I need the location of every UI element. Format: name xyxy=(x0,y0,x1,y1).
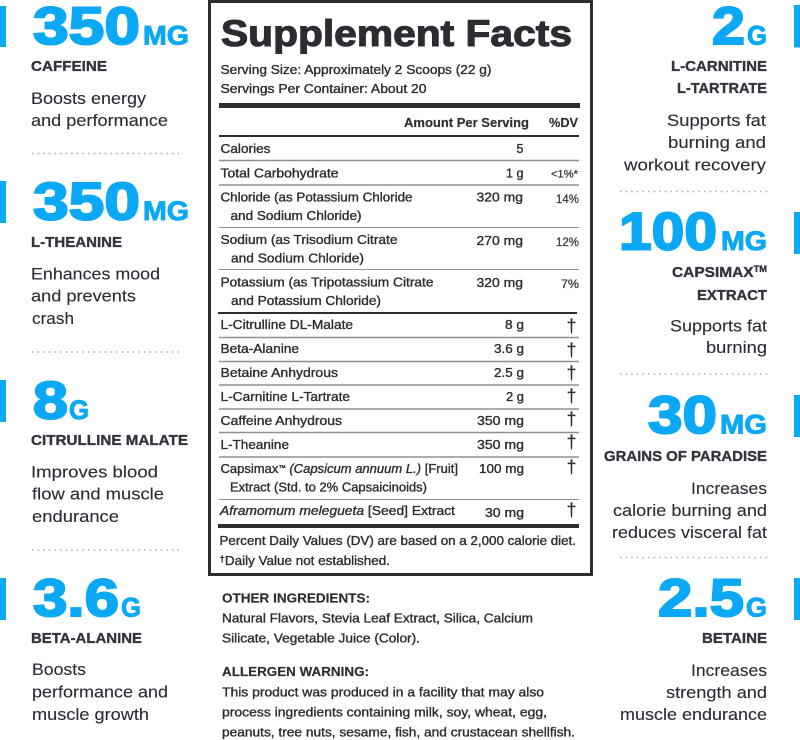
callout: 100 mg capsimax extract xyxy=(619,202,800,357)
callout: 100 mg capsimax extract: EXTRACT xyxy=(697,287,767,304)
text block: other ingredients xyxy=(222,592,533,646)
callout: 2.5 g betaine: strength and xyxy=(666,684,767,702)
callout: 8 g citrulline malate xyxy=(0,372,188,526)
row: betaine: 2.5 g xyxy=(494,366,524,380)
row: l-citrulline: L-Citrulline DL-Malate xyxy=(220,318,353,332)
callout: 30 mg grains of paradise: Increases xyxy=(691,480,767,498)
callout: 8 g citrulline malate: flow and muscle xyxy=(32,486,164,504)
callout: 100 mg capsimax extract: TM xyxy=(754,264,767,274)
row: l-theanine: 350 mg xyxy=(477,438,524,452)
row: sodium: Sodium (as Trisodium Citrate xyxy=(220,233,398,247)
callout: 3.6 g beta-alanine xyxy=(0,569,168,724)
callout: 350 mg caffeine: MG xyxy=(143,20,189,50)
row: capsimax: 100 mg xyxy=(479,462,524,476)
callout: 2.5 g betaine xyxy=(620,569,800,724)
row: betaine xyxy=(220,363,577,383)
footnotes: Percent Daily Values (DV) are based on a 2,000 calorie diet. xyxy=(220,534,576,548)
row: potassium: Potassium (as Tripotassium Citrate xyxy=(220,276,434,290)
footnotes xyxy=(220,534,576,568)
row: l-carnitine: † xyxy=(566,386,577,406)
callout: 3.6 g beta-alanine: BETA-ALANINE xyxy=(31,630,142,647)
left column: ingredient callouts xyxy=(0,0,189,724)
callout: 2 g l-carnitine l-tartrate xyxy=(623,0,800,174)
table header xyxy=(404,116,579,130)
callout: 350 mg caffeine xyxy=(0,0,189,130)
row: total carbohydrate: Total Carbohydrate xyxy=(220,166,339,180)
callout: 2.5 g betaine: muscle endurance xyxy=(620,706,767,724)
row: sodium: 270 mg xyxy=(476,234,523,248)
callout: 2 g l-carnitine l-tartrate: L-CARNITINE xyxy=(671,58,767,75)
row: chloride: 320 mg xyxy=(476,190,523,204)
callout: 3.6 g beta-alanine: performance and xyxy=(32,684,168,702)
row: calories xyxy=(220,142,524,156)
row: capsimax: (Capsicum annuum L.) [Fruit] xyxy=(289,462,457,476)
table header: Amount Per Serving xyxy=(404,116,529,130)
callout: 350 mg l-theanine: and prevents xyxy=(31,288,136,306)
callout: 350 mg l-theanine xyxy=(0,172,189,328)
text block: other ingredients: OTHER INGREDIENTS: xyxy=(222,592,370,606)
callout: 2.5 g betaine: 2.5 xyxy=(658,569,744,628)
callout: 100 mg capsimax extract: CAPSIMAX xyxy=(672,264,751,281)
text block: allergen warning xyxy=(222,665,575,740)
callout: 2.5 g betaine: G xyxy=(746,592,767,622)
table header: %DV xyxy=(549,116,579,130)
panel: supplement facts xyxy=(210,2,592,574)
callout: 350 mg caffeine: CAFFEINE xyxy=(31,58,107,75)
row: calories: 5 xyxy=(516,142,524,156)
callout: 30 mg grains of paradise: reduces visceral fat xyxy=(612,524,767,542)
callout: 3.6 g beta-alanine: muscle growth xyxy=(32,706,149,724)
text block: allergen warning: This product was produced in a facility that may also xyxy=(222,686,544,700)
row: potassium xyxy=(220,276,579,308)
callout: 8 g citrulline malate: Improves blood xyxy=(31,464,158,482)
row: l-theanine: † xyxy=(566,432,577,452)
row: beta-alanine xyxy=(220,340,577,360)
row: total carbohydrate xyxy=(220,166,579,180)
row: chloride: 14% xyxy=(556,194,579,206)
row: l-carnitine xyxy=(220,386,577,406)
callout: 350 mg caffeine: Boosts energy xyxy=(31,90,147,108)
row: capsimax: † xyxy=(566,457,577,477)
row: calories: Calories xyxy=(220,142,270,156)
row: potassium: and Potassium Chloride) xyxy=(231,294,381,308)
callout: 30 mg grains of paradise: 30 xyxy=(648,386,717,445)
callout: 350 mg l-theanine: 350 xyxy=(33,172,140,232)
callout: 350 mg l-theanine: L-THEANINE xyxy=(31,234,122,251)
callout: 350 mg l-theanine: MG xyxy=(143,196,189,226)
row: chloride: and Sodium Chloride) xyxy=(230,209,362,223)
callout: 3.6 g beta-alanine: Boosts xyxy=(32,661,86,679)
row: caffeine: Caffeine Anhydrous xyxy=(220,414,342,428)
callout: 8 g citrulline malate: CITRULLINE MALATE xyxy=(31,432,188,449)
row: caffeine xyxy=(220,409,577,429)
row: l-carnitine: 2 g xyxy=(506,390,524,404)
callout: 2 g l-carnitine l-tartrate: G xyxy=(747,20,767,50)
callout: 30 mg grains of paradise xyxy=(604,386,800,542)
row: l-carnitine: L-Carnitine L-Tartrate xyxy=(220,390,350,404)
row: potassium: 7% xyxy=(561,279,579,291)
row: l-citrulline: † xyxy=(566,316,577,336)
right column: ingredient callouts xyxy=(604,0,800,724)
row: betaine: † xyxy=(566,363,577,383)
row: beta-alanine: † xyxy=(566,340,577,360)
callout: 350 mg l-theanine: crash xyxy=(32,310,74,328)
row: caffeine: † xyxy=(566,409,577,429)
row: capsimax: Extract (Std. to 2% Capsaicinoids) xyxy=(230,480,427,494)
serving information: Serving Size: Approximately 2 Scoops (22 g) xyxy=(220,63,492,77)
row: betaine: Betaine Anhydrous xyxy=(220,366,338,380)
row: l-citrulline xyxy=(220,316,577,336)
row: l-theanine: L-Theanine xyxy=(220,438,289,452)
callout: 3.6 g beta-alanine: 3.6 xyxy=(33,569,119,628)
text block: allergen warning: peanuts, tree nuts, sesame, fish, and crustacean shellfish. xyxy=(222,726,575,740)
callout: 8 g citrulline malate: endurance xyxy=(32,508,119,526)
callout: 350 mg l-theanine: Enhances mood xyxy=(31,266,160,284)
callout: 30 mg grains of paradise: calorie burning and xyxy=(613,502,767,520)
callout: 100 mg capsimax extract: MG xyxy=(721,226,767,256)
row: total carbohydrate: 1 g xyxy=(506,166,524,180)
serving information xyxy=(220,63,492,96)
row: potassium: 320 mg xyxy=(476,276,523,290)
callout: 2 g l-carnitine l-tartrate: workout recovery xyxy=(623,156,767,174)
row: aframomum: † xyxy=(566,500,577,520)
row: caffeine: 350 mg xyxy=(477,414,524,428)
row: beta-alanine: 3.6 g xyxy=(494,342,524,356)
row: beta-alanine: Beta-Alanine xyxy=(220,342,299,356)
row: capsimax: ™ xyxy=(278,465,286,472)
text block: allergen warning: ALLERGEN WARNING: xyxy=(222,665,369,679)
title: Supplement Facts xyxy=(221,13,572,54)
callout: 2.5 g betaine: BETAINE xyxy=(702,630,767,647)
callout: 8 g citrulline malate: G xyxy=(69,395,89,425)
callout: 2 g l-carnitine l-tartrate: burning and xyxy=(668,134,766,152)
row: chloride xyxy=(220,190,579,223)
footnotes: Daily Value not established. xyxy=(225,554,390,568)
text block: allergen warning: process ingredients containing milk, soy, wheat, egg, xyxy=(222,706,547,720)
callout: 100 mg capsimax extract: burning xyxy=(706,339,767,357)
row: aframomum xyxy=(219,500,577,520)
row: aframomum: 30 mg xyxy=(485,506,524,520)
row: l-citrulline: 8 g xyxy=(505,318,524,332)
callout: 100 mg capsimax extract: Supports fat xyxy=(670,318,767,336)
row: capsimax: Capsimax xyxy=(220,462,276,476)
callout: 2 g l-carnitine l-tartrate: Supports fat xyxy=(667,112,766,130)
row: sodium xyxy=(220,233,579,266)
callout: 30 mg grains of paradise: MG xyxy=(720,410,767,440)
row: sodium: and Sodium Chloride) xyxy=(231,252,364,266)
callout: 100 mg capsimax extract: 100 xyxy=(619,202,717,262)
row: total carbohydrate: <1%* xyxy=(551,168,579,180)
text block: other ingredients: Natural Flavors, Stevia Leaf Extract, Silica, Calcium xyxy=(222,612,533,626)
callout: 350 mg caffeine: and performance xyxy=(31,112,168,130)
callout: 2 g l-carnitine l-tartrate: L-TARTRATE xyxy=(677,80,767,97)
row: sodium: 12% xyxy=(556,237,579,249)
callout: 3.6 g beta-alanine: G xyxy=(121,592,141,622)
callout: 30 mg grains of paradise: GRAINS OF PARADISE xyxy=(604,448,767,465)
footnotes: † xyxy=(220,554,225,564)
text block: other ingredients: Silicate, Vegetable Juice (Color). xyxy=(222,632,420,646)
callout: 8 g citrulline malate: 8 xyxy=(33,372,68,430)
callout: 2.5 g betaine: Increases xyxy=(691,662,767,680)
row: l-theanine xyxy=(220,432,577,452)
row: chloride: Chloride (as Potassium Chloride xyxy=(220,190,413,204)
serving information: Servings Per Container: About 20 xyxy=(220,82,427,96)
row: aframomum: Aframomum melegueta [Seed] Extract xyxy=(219,504,456,518)
row: capsimax xyxy=(220,457,577,494)
